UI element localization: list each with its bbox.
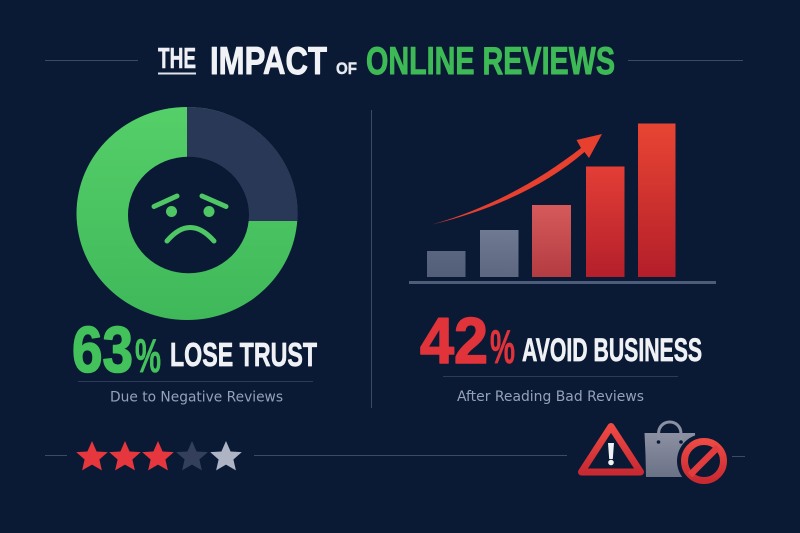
star rating: [76, 441, 242, 470]
vertical panel divider: [370, 110, 372, 408]
stat: 63% lose trust: LOSE TRUST: [170, 336, 317, 373]
title: OF: [336, 59, 357, 78]
icon: warning triangle: [582, 426, 640, 472]
caption: after reading bad reviews: After Reading Bad Reviews: [457, 389, 644, 405]
icon: sad face: [154, 196, 226, 241]
donut chart: 63 percent: [76, 107, 298, 320]
title: THE: [158, 43, 196, 75]
stat: 42% avoid business: 42: [420, 304, 488, 377]
panel: avoid business: [409, 124, 716, 405]
icon: prohibition sign: [677, 434, 731, 488]
bar chart: [409, 124, 716, 284]
title: ONLINE REVIEWS: [366, 40, 615, 83]
stat: 63% lose trust: [72, 313, 317, 386]
arrow: rising trend: [432, 134, 602, 224]
panel: lose trust: [72, 107, 317, 405]
caption: due to negative reviews: Due to Negative Reviews: [110, 390, 283, 406]
title: [45, 40, 743, 83]
stat: 42% avoid business: [420, 304, 702, 377]
stat: 63% lose trust: %: [135, 329, 161, 382]
stat: 42% avoid business: %: [490, 320, 515, 373]
icon: shopping bag: [644, 422, 697, 477]
stat: 63% lose trust: 63: [72, 313, 133, 386]
stat: 42% avoid business: AVOID BUSINESS: [522, 332, 702, 368]
title: IMPACT: [210, 40, 327, 83]
